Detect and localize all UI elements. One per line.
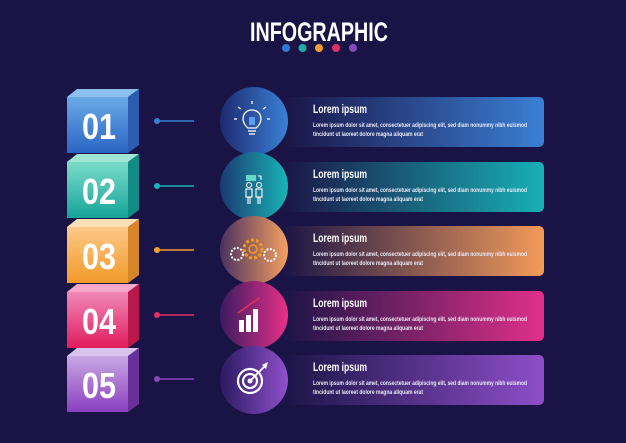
bar 4 — [282, 291, 544, 341]
title — [250, 17, 388, 52]
circle icon: target — [220, 346, 288, 414]
circle icon: gears — [220, 216, 288, 284]
row 2 — [67, 152, 544, 220]
connector 2 — [154, 183, 194, 189]
connector 5 — [154, 376, 194, 382]
circle icon: chart — [220, 281, 288, 349]
cube 01 — [67, 89, 139, 153]
bar 5: Lorem ipsum — [313, 360, 367, 374]
circle icon: people — [220, 152, 288, 220]
row 1 — [67, 87, 544, 155]
bar 5 — [282, 355, 544, 405]
bar 4: Lorem ipsum dolor sit amet, consectetuer adipiscing elit, sed diam nonummy nibh euismod — [313, 316, 527, 323]
cube 03 — [67, 219, 139, 283]
bar 1: Lorem ipsum — [313, 102, 367, 116]
bar 1: Lorem ipsum dolor sit amet, consectetuer adipiscing elit, sed diam nonummy nibh euismod — [313, 122, 527, 129]
bar 3: Lorem ipsum dolor sit amet, consectetuer adipiscing elit, sed diam nonummy nibh euismod — [313, 251, 527, 258]
cube 02 — [67, 154, 139, 218]
row 5 — [67, 346, 544, 414]
bar 2: Lorem ipsum dolor sit amet, consectetuer adipiscing elit, sed diam nonummy nibh euismod — [313, 187, 527, 194]
bar 5: Lorem ipsum dolor sit amet, consectetuer adipiscing elit, sed diam nonummy nibh euismod — [313, 380, 527, 387]
bar 2: tincidunt ut laoreet dolore magna aliquam erat — [313, 196, 424, 203]
connector 3 — [154, 247, 194, 253]
bar 3: Lorem ipsum — [313, 231, 367, 245]
bar 1: tincidunt ut laoreet dolore magna aliquam erat — [313, 131, 424, 138]
cube 05 — [67, 348, 139, 412]
cube 01: 01 — [82, 106, 116, 147]
cube 05: 05 — [82, 365, 116, 406]
cube 04: 04 — [82, 301, 116, 342]
cube 03: 03 — [82, 236, 116, 277]
title: INFOGRAPHIC — [250, 17, 388, 47]
cube 02: 02 — [82, 171, 116, 212]
bar 3 — [282, 226, 544, 276]
connector 1 — [154, 118, 194, 124]
bar 5: tincidunt ut laoreet dolore magna aliquam erat — [313, 389, 424, 396]
row 3 — [67, 216, 544, 284]
bar 2 — [282, 162, 544, 212]
bar 2: Lorem ipsum — [313, 167, 367, 181]
cube 04 — [67, 284, 139, 348]
circle icon: lightbulb — [220, 87, 288, 155]
bar 1 — [282, 97, 544, 147]
bar 3: tincidunt ut laoreet dolore magna aliquam erat — [313, 260, 424, 267]
connector 4 — [154, 312, 194, 318]
bar 4: Lorem ipsum — [313, 296, 367, 310]
bar 4: tincidunt ut laoreet dolore magna aliquam erat — [313, 325, 424, 332]
row 4 — [67, 281, 544, 349]
